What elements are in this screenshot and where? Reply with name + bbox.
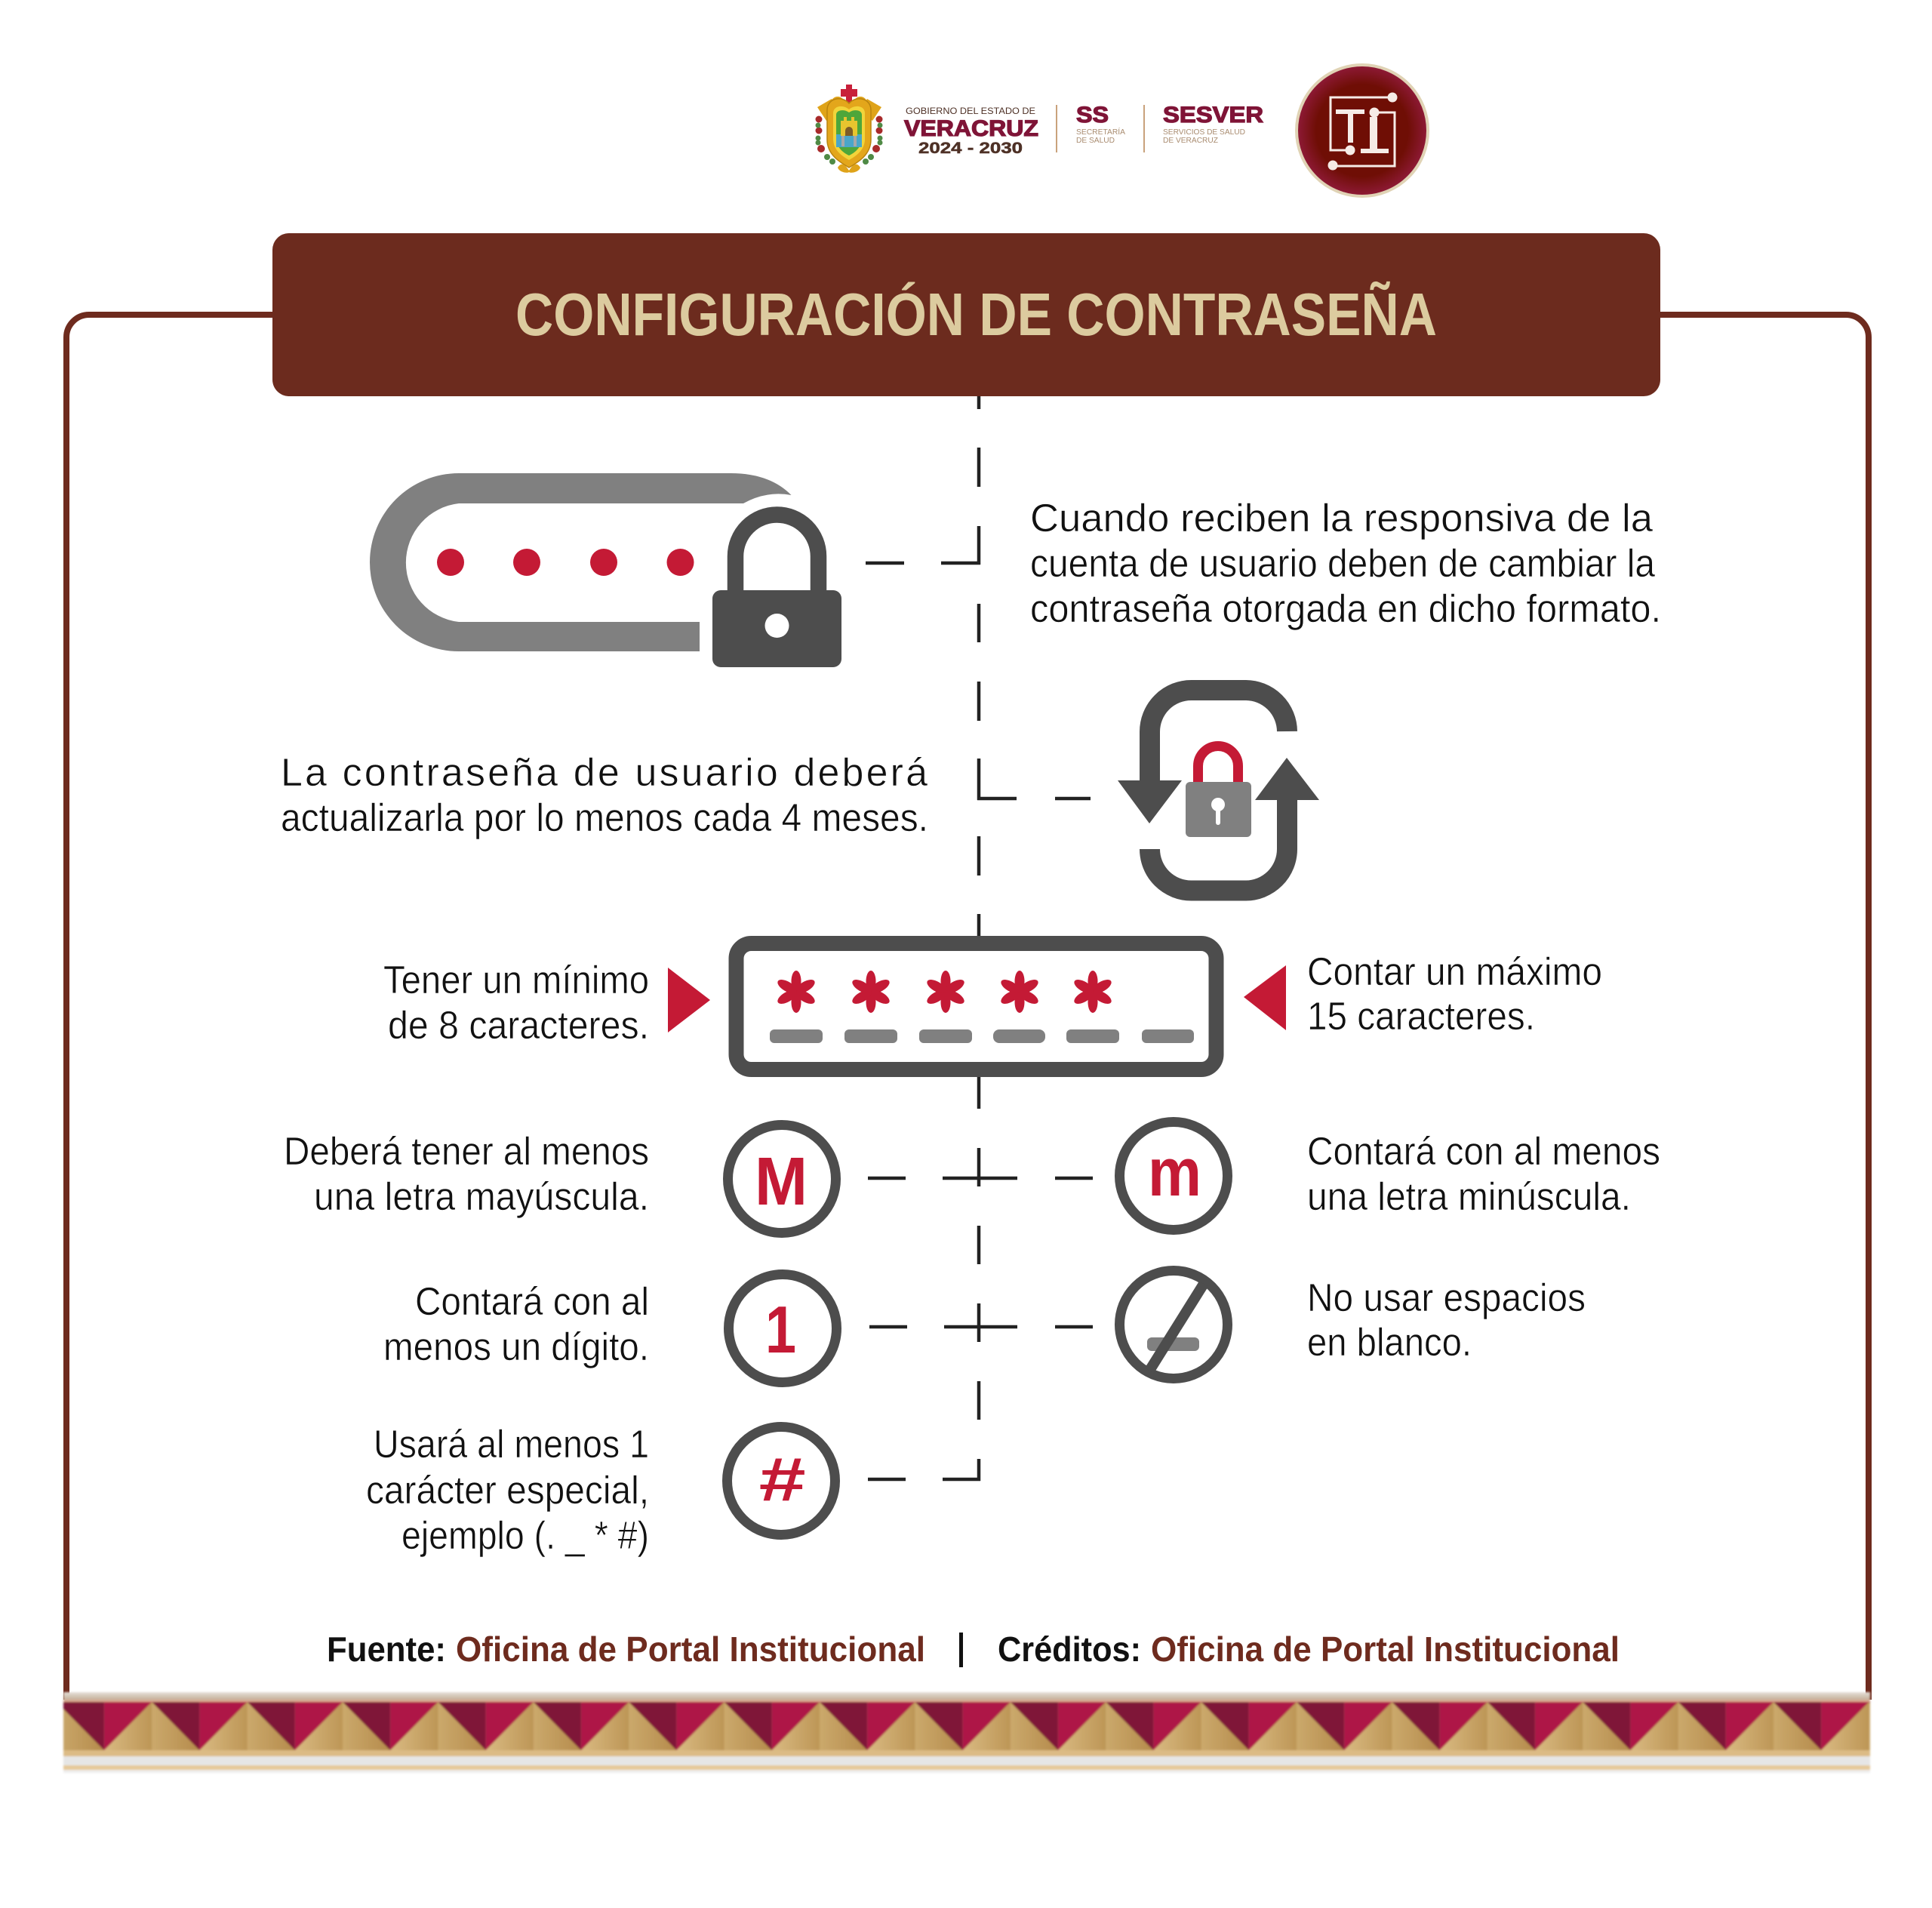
text: máximo 15 caracteres: 15 caracteres. xyxy=(1307,995,1535,1039)
icon: special character hash xyxy=(728,1426,835,1535)
logo text: Gobierno de Veracruz xyxy=(904,106,1038,157)
logo text: SESVER: SERVICIOS DE SALUD xyxy=(1163,128,1245,137)
text: sin espacios xyxy=(1307,1276,1586,1365)
logo text: Gobierno de Veracruz: GOBIERNO DEL ESTADO DE xyxy=(906,106,1035,116)
text: un dígito xyxy=(383,1280,649,1369)
text: mínimo 8 caracteres xyxy=(383,959,649,1048)
logo text: SESVER: SESVER xyxy=(1163,103,1263,128)
logo text: SS Secretaría de Salud: DE SALUD xyxy=(1076,137,1115,145)
icon: TI circular badge xyxy=(1297,65,1428,196)
logo text: SS Secretaría de Salud: SS xyxy=(1076,103,1109,128)
footer credits: Oficina de Portal Institucional xyxy=(1151,1629,1620,1669)
text: un dígito: Contará con al xyxy=(415,1280,649,1324)
icon: no spaces xyxy=(1120,1271,1227,1378)
footer credits: Créditos: xyxy=(998,1629,1141,1669)
text: responsiva: Cuando reciben la responsiva de la xyxy=(1030,497,1653,540)
logo text: SESVER xyxy=(1163,103,1263,145)
text: letra mayúscula: una letra mayúscula. xyxy=(314,1175,649,1219)
logo text: SS Secretaría de Salud xyxy=(1076,103,1125,145)
text: responsiva xyxy=(1030,497,1661,631)
icon: password pill with padlock xyxy=(370,473,841,667)
footer credits: Oficina de Portal Institucional xyxy=(456,1629,925,1669)
icon: rotating arrows with padlock xyxy=(1118,690,1319,891)
text: letra minúscula: Contará con al menos xyxy=(1307,1130,1660,1174)
footer credits: Fuente: xyxy=(327,1629,446,1669)
logo text: Gobierno de Veracruz: VERACRUZ xyxy=(904,116,1038,141)
text: máximo 15 caracteres xyxy=(1307,950,1602,1039)
text: actualizar cada 4 meses: La contraseña de usuario deberá xyxy=(281,751,928,795)
arrow: left-pointing red triangle xyxy=(1244,965,1286,1030)
text: letra mayúscula: Deberá tener al menos xyxy=(284,1130,649,1174)
arrow: right-pointing red triangle xyxy=(668,968,710,1032)
text: mínimo 8 caracteres: Tener un mínimo xyxy=(383,959,649,1002)
heading: CONFIGURACIÓN DE CONTRASEÑA xyxy=(515,281,1437,348)
text: responsiva: contraseña otorgada en dicho formato. xyxy=(1030,587,1661,631)
text: carácter especial: ejemplo (. _ * #) xyxy=(401,1514,649,1558)
title banner xyxy=(272,233,1660,396)
logo text: SESVER: DE VERACRUZ xyxy=(1163,137,1218,145)
text: carácter especial xyxy=(366,1423,649,1558)
panel outline xyxy=(66,315,1869,1700)
icon: uppercase M: M xyxy=(755,1144,808,1220)
text: carácter especial: Usará al menos 1 xyxy=(374,1423,649,1466)
text: actualizar cada 4 meses xyxy=(281,751,928,840)
icon: lowercase m: m xyxy=(1148,1135,1201,1211)
text: actualizar cada 4 meses: actualizarla por lo menos cada 4 meses. xyxy=(281,796,928,840)
icon: lowercase m xyxy=(1120,1122,1227,1230)
logo text: Gobierno de Veracruz: 2024 - 2030 xyxy=(918,140,1023,157)
text: máximo 15 caracteres: Contar un máximo xyxy=(1307,950,1602,994)
icon: digit 1 xyxy=(729,1274,836,1383)
text: letra mayúscula xyxy=(284,1130,649,1219)
icon: digit 1: 1 xyxy=(765,1292,796,1367)
text: sin espacios: en blanco. xyxy=(1307,1321,1472,1365)
text: sin espacios: No usar espacios xyxy=(1307,1276,1586,1320)
icon: Veracruz coat of arms xyxy=(815,85,883,173)
icon: uppercase M xyxy=(728,1125,836,1233)
decorative footer band xyxy=(63,1692,1870,1773)
header logos xyxy=(815,65,1428,196)
text: un dígito: menos un dígito. xyxy=(383,1325,649,1369)
logo text: SS Secretaría de Salud: SECRETARÍA xyxy=(1076,127,1125,137)
icon: special character hash: # xyxy=(758,1445,805,1514)
dashed central connector xyxy=(866,395,1093,1481)
text: carácter especial: carácter especial, xyxy=(366,1469,649,1513)
text: mínimo 8 caracteres: de 8 caracteres. xyxy=(388,1004,649,1048)
text: letra minúscula: una letra minúscula. xyxy=(1307,1175,1631,1219)
text: responsiva: cuenta de usuario deben de cambiar la xyxy=(1030,542,1655,586)
footer credits xyxy=(327,1629,1620,1669)
icon: password field xyxy=(737,943,1217,1069)
text: letra minúscula xyxy=(1307,1130,1660,1219)
